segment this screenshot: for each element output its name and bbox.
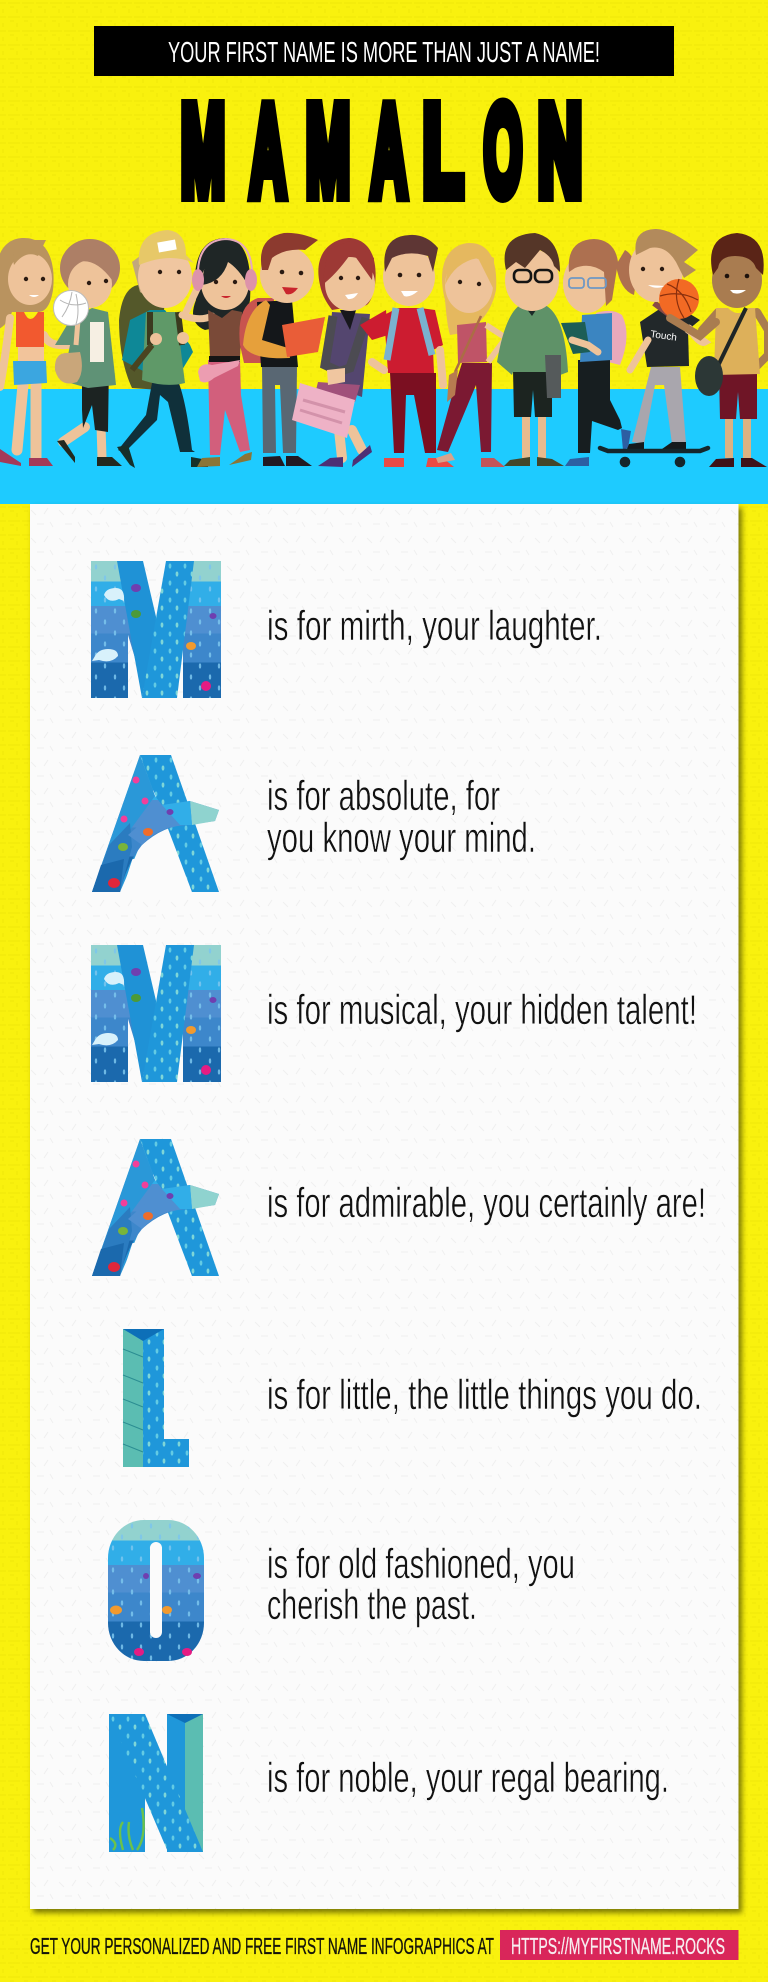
icon: ocean letter M: M bbox=[83, 528, 229, 738]
person 11: boy on skateboard with basketball: Touch bbox=[650, 329, 678, 344]
banner illustration: blue floor and group of students bbox=[0, 229, 768, 504]
person 11: boy on skateboard with basketball bbox=[600, 229, 708, 467]
title: MAMALON: A bbox=[371, 80, 407, 221]
text: old fashioned bbox=[267, 1540, 575, 1628]
title: MAMALON: A bbox=[250, 80, 286, 221]
person 8: blonde girl in rose top bbox=[436, 243, 506, 467]
person 4: girl with black hair, headphones and pink jeans bbox=[182, 238, 257, 467]
row 4: A is for admirable bbox=[92, 1106, 706, 1316]
person 1: girl in orange top with blue shorts bbox=[0, 238, 80, 466]
icon: ocean letter N: N bbox=[99, 1681, 213, 1893]
person 2: girl in green jacket holding a volleyball bbox=[54, 239, 122, 466]
icon: ocean letter O bbox=[108, 1492, 204, 1693]
person 3: boy with yellow cap and large backpack bbox=[117, 230, 208, 468]
row 1: M is for mirth bbox=[83, 528, 602, 738]
text: old fashioned: is for old fashioned, you bbox=[267, 1540, 575, 1587]
text: absolute bbox=[267, 772, 536, 861]
row 3: M is for musical bbox=[83, 912, 697, 1122]
person 5: boy with red hair holding an orange book bbox=[239, 233, 325, 466]
title: MAMALON: O bbox=[484, 80, 522, 221]
title: MAMALON: L bbox=[423, 80, 463, 221]
row 7: N is for noble bbox=[99, 1681, 669, 1893]
title: MAMALON: M bbox=[306, 80, 350, 221]
person 10: girl with ponytail, glasses and tablet bbox=[561, 239, 636, 466]
icon: ocean letter A: A bbox=[92, 722, 219, 932]
text: absolute: is for absolute, for bbox=[267, 772, 500, 819]
blue floor bbox=[0, 389, 768, 504]
icon: ocean letter L bbox=[115, 1296, 191, 1508]
row 6: O is for old fashioned bbox=[108, 1492, 575, 1693]
row 2: A is for absolute bbox=[92, 722, 536, 932]
main white panel bbox=[30, 504, 742, 1913]
text: mirth: is for mirth, your laughter. bbox=[267, 602, 602, 649]
icon: ocean letter L: L bbox=[115, 1296, 191, 1508]
title: MAMALON: M bbox=[181, 80, 225, 221]
skateboard bbox=[600, 448, 708, 467]
person 6: girl with red hair and pink suitcase bbox=[292, 238, 376, 467]
tagline banner bbox=[94, 26, 674, 76]
person 12: curly-haired boy in yellow tank top with dark bag bbox=[670, 233, 768, 467]
row 5: L is for little bbox=[115, 1296, 702, 1508]
text: absolute: you know your mind. bbox=[267, 814, 536, 861]
icon: ocean letter M: M bbox=[83, 912, 229, 1122]
icon: ocean letter O: O bbox=[110, 1492, 202, 1693]
icon: ocean letter A: A bbox=[92, 1106, 219, 1316]
person 9: boy with glasses in green sweater bbox=[497, 233, 568, 466]
text: N bbox=[538, 80, 582, 221]
person 7: boy in red shirt with blue backpack straps bbox=[360, 235, 454, 467]
text: old fashioned: cherish the past. bbox=[267, 1581, 477, 1628]
footer call to action bbox=[30, 1930, 738, 1960]
